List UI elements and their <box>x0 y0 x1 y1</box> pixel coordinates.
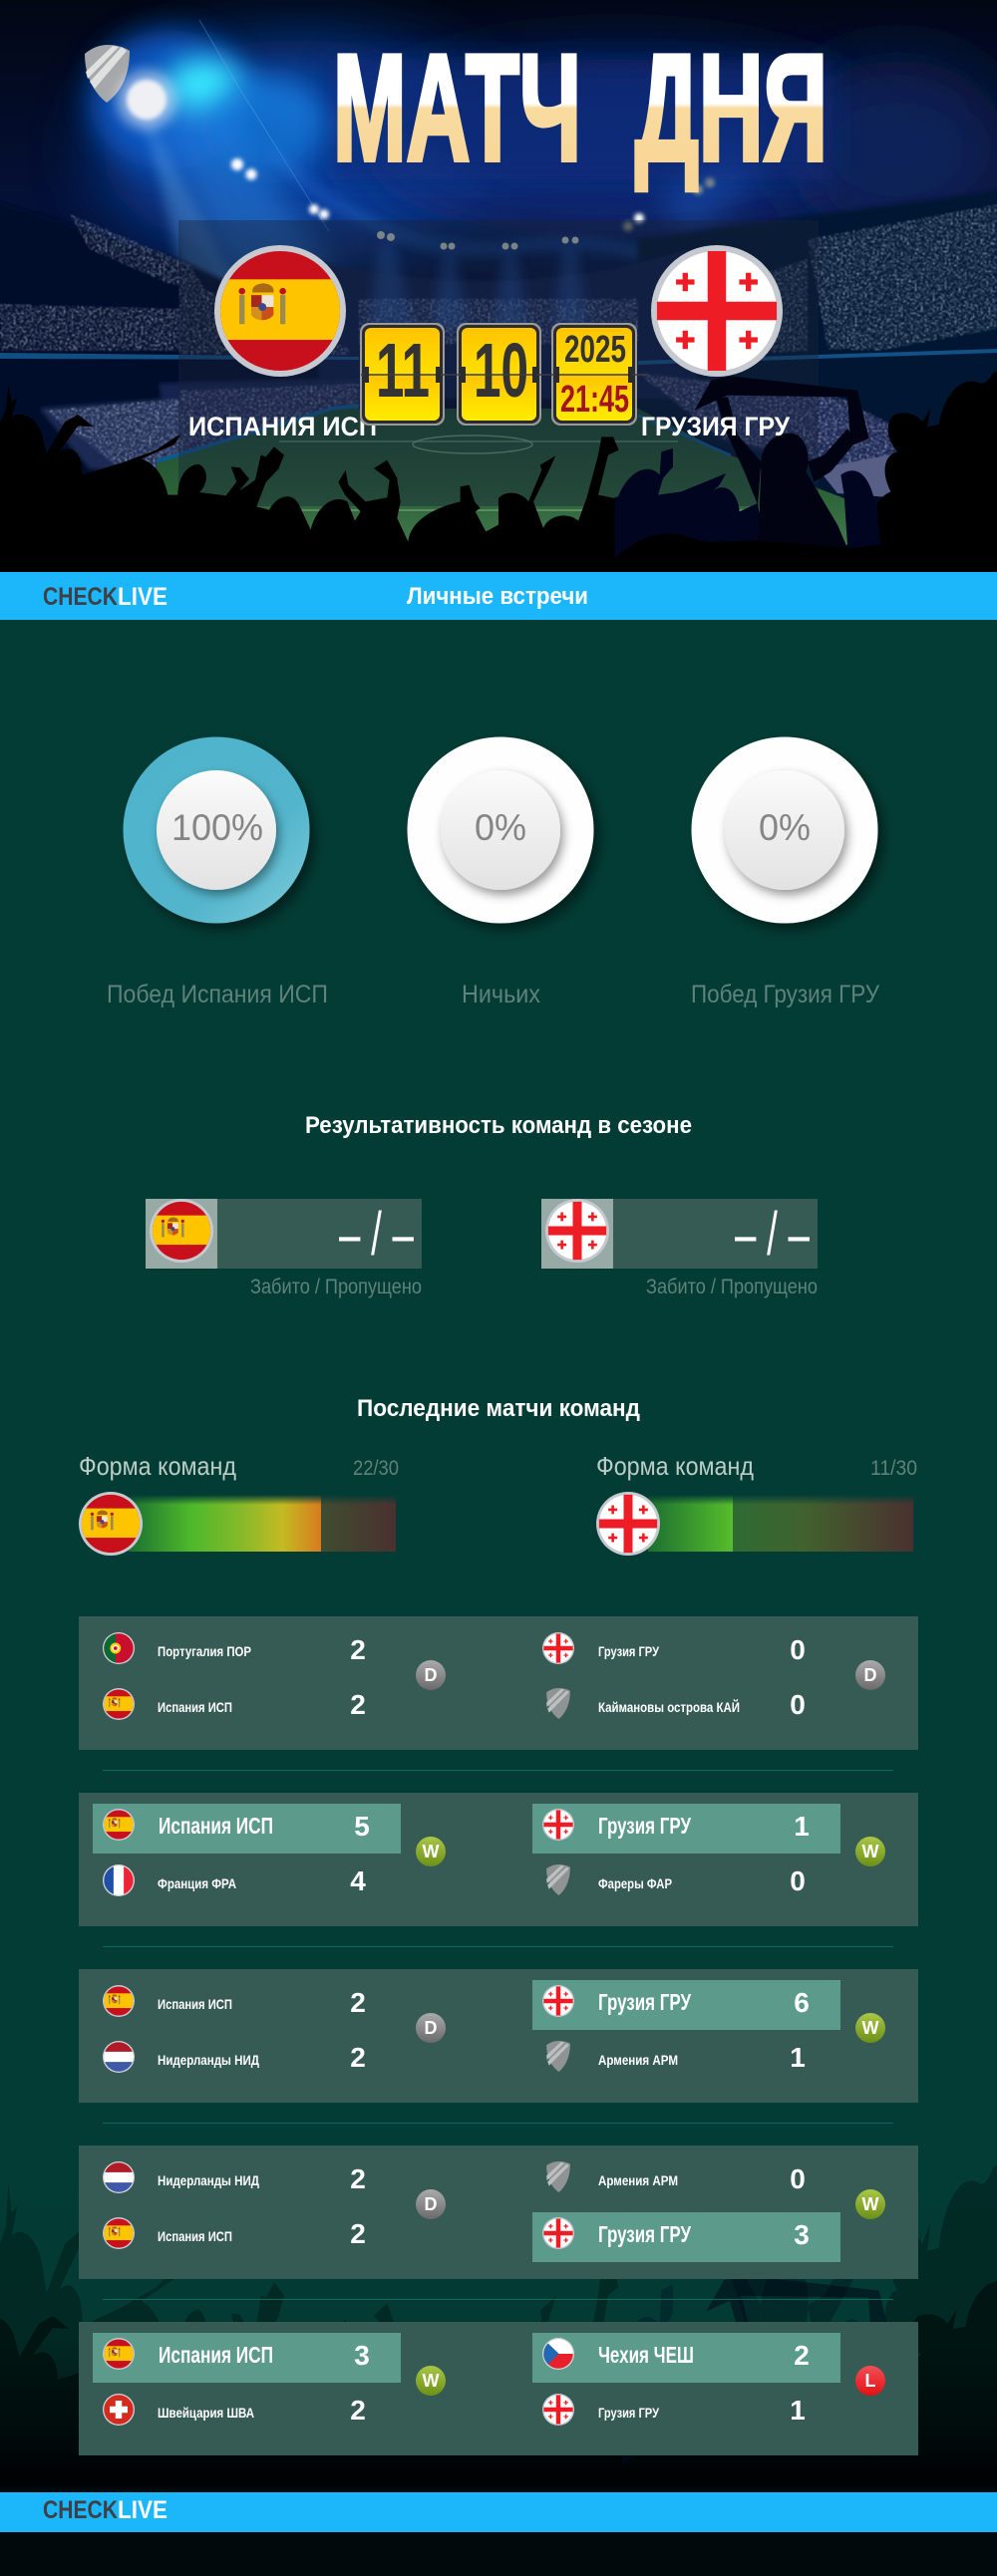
right match: Грузия ГРУ <box>598 1989 692 2015</box>
card: year and time: 21:45 <box>560 379 629 421</box>
right match: Грузия ГРУ <box>598 1643 659 1659</box>
right match: 3 <box>794 2219 810 2250</box>
divider <box>103 2123 893 2125</box>
right match: 1 <box>790 2042 806 2073</box>
left match: 5 <box>354 1811 370 1842</box>
match panel overlay <box>178 220 819 506</box>
right match: Каймановы острова КАЙ <box>598 1698 740 1715</box>
right match: Грузия ГРУ <box>598 1813 692 1839</box>
form: Georgia: Форма команд <box>596 1451 754 1481</box>
card: month <box>457 323 541 426</box>
right match: Армения АРМ <box>598 2052 678 2068</box>
right match: Армения АРМ <box>598 2172 678 2188</box>
left match: 2 <box>350 2395 366 2426</box>
left match: Нидерланды НИД <box>158 2052 259 2068</box>
goals box: Georgia: Забито / Пропущено <box>646 1276 818 1298</box>
form: Spain: Форма команд <box>79 1451 236 1481</box>
right match: 0 <box>790 1634 806 1665</box>
form: Spain: 22/30 <box>353 1457 399 1480</box>
flip date cards <box>360 323 649 426</box>
left match: 3 <box>354 2340 370 2371</box>
card: day: 11 <box>376 328 430 414</box>
right match: 1 <box>794 1811 810 1842</box>
stat: draws: 0% <box>475 807 526 848</box>
floodlight flare <box>117 70 176 130</box>
right match: 6 <box>794 1987 810 2018</box>
left match <box>93 1804 446 1896</box>
heading: last matches: Последние матчи команд <box>357 1395 640 1422</box>
left match: 2 <box>350 2042 366 2073</box>
divider <box>103 1945 893 1947</box>
section title: Личные встречи: Личные встречи <box>407 583 588 610</box>
goals box: Spain: – / – <box>339 1200 414 1268</box>
match panel 5 <box>79 2322 918 2455</box>
right match: Фареры ФАР <box>598 1875 672 1891</box>
left match: 2 <box>350 2163 366 2194</box>
left match: D <box>425 1665 437 1685</box>
stat: Georgia wins <box>691 737 879 1008</box>
right match <box>532 1980 885 2073</box>
title: МАТЧ ДНЯ: МАТЧ <box>333 24 581 193</box>
right match <box>542 1632 885 1720</box>
left match: D <box>425 2194 437 2214</box>
logo: CHECK <box>43 583 118 611</box>
left match: Нидерланды НИД <box>158 2172 259 2188</box>
left match: Швейцария ШВА <box>158 2405 254 2421</box>
goals box: Spain <box>146 1199 422 1298</box>
stat: Spain wins <box>107 737 328 1008</box>
right match: L <box>865 2371 875 2391</box>
form: Georgia: 11/30 <box>870 1457 917 1480</box>
right match: 0 <box>790 2163 806 2194</box>
stat: Spain wins: 100% <box>171 807 263 848</box>
card: year and time <box>551 323 637 426</box>
top bar <box>0 572 997 620</box>
card: day <box>360 323 445 426</box>
right match <box>532 1804 885 1896</box>
form: Spain <box>79 1451 399 1556</box>
header stadium image <box>0 0 997 572</box>
stadium lights <box>231 158 715 231</box>
flag: Spain <box>214 245 346 377</box>
match panel 4 <box>79 2146 918 2279</box>
right match: Грузия ГРУ <box>598 2405 659 2421</box>
left match: 2 <box>350 1689 366 1720</box>
right match: W <box>861 1842 879 1861</box>
stat: draws <box>407 737 594 1008</box>
left match: Испания ИСП <box>158 1699 232 1715</box>
card: year and time: 2025 <box>564 329 626 371</box>
right match: 0 <box>790 1689 806 1720</box>
left match: W <box>423 1842 439 1861</box>
flag: Georgia <box>651 245 783 377</box>
right match: 0 <box>790 1865 806 1896</box>
divider <box>103 1770 893 1772</box>
right match <box>532 2161 885 2262</box>
left match: Испания ИСП <box>159 1813 273 1839</box>
left match: 2 <box>350 1634 366 1665</box>
title: МАТЧ ДНЯ: ДНЯ <box>635 24 828 193</box>
divider <box>103 2298 893 2300</box>
left match <box>93 2333 446 2426</box>
left match: Франция ФРА <box>158 1875 236 1891</box>
left match <box>103 2161 446 2249</box>
stat: Georgia wins: 0% <box>759 807 811 848</box>
stat: Georgia wins: Побед Грузия ГРУ <box>691 981 879 1008</box>
bottom bar <box>0 2492 997 2532</box>
goals box: Georgia: – / – <box>735 1200 810 1268</box>
left match <box>103 1632 446 1720</box>
left match: 2 <box>350 1987 366 2018</box>
left match: Испания ИСП <box>158 1996 232 2012</box>
shield logo <box>85 45 130 103</box>
right match: W <box>861 2194 879 2214</box>
right match <box>532 2333 885 2426</box>
form: Georgia <box>596 1451 917 1556</box>
logo: LIVE <box>118 583 167 611</box>
left match: W <box>423 2371 439 2391</box>
footer crowd background <box>0 2143 997 2576</box>
left match: D <box>425 2018 437 2038</box>
match panel 2 <box>79 1793 918 1926</box>
card: month: 10 <box>474 328 528 414</box>
right match: 2 <box>794 2340 810 2371</box>
logo: LIVE <box>118 2496 167 2524</box>
left match <box>103 1985 446 2073</box>
right match: Чехия ЧЕШ <box>598 2342 694 2368</box>
logo: CHECK <box>43 2496 118 2524</box>
match panel 1 <box>79 1616 918 1750</box>
goals box: Spain: Забито / Пропущено <box>250 1276 422 1298</box>
right match: Грузия ГРУ <box>598 2221 692 2247</box>
right match: D <box>863 1665 877 1685</box>
left match: 2 <box>350 2218 366 2249</box>
goals box: Georgia <box>541 1199 818 1298</box>
stat: Spain wins: Побед Испания ИСП <box>107 981 328 1008</box>
left match: Испания ИСП <box>158 2228 232 2244</box>
left match: Португалия ПОР <box>158 1643 251 1659</box>
team name: Испания: ИСПАНИЯ ИСП <box>188 412 377 441</box>
crowd silhouettes <box>0 372 997 578</box>
right match: 1 <box>790 2395 806 2426</box>
heading: season performance: Результативность команд в сезоне <box>305 1112 692 1139</box>
match panel 3 <box>79 1969 918 2103</box>
right match: W <box>861 2018 879 2038</box>
stat: draws: Ничьих <box>462 981 540 1008</box>
team name: Грузия: ГРУЗИЯ ГРУ <box>641 412 791 441</box>
left match: 4 <box>350 1865 366 1896</box>
left match: Испания ИСП <box>159 2342 273 2368</box>
